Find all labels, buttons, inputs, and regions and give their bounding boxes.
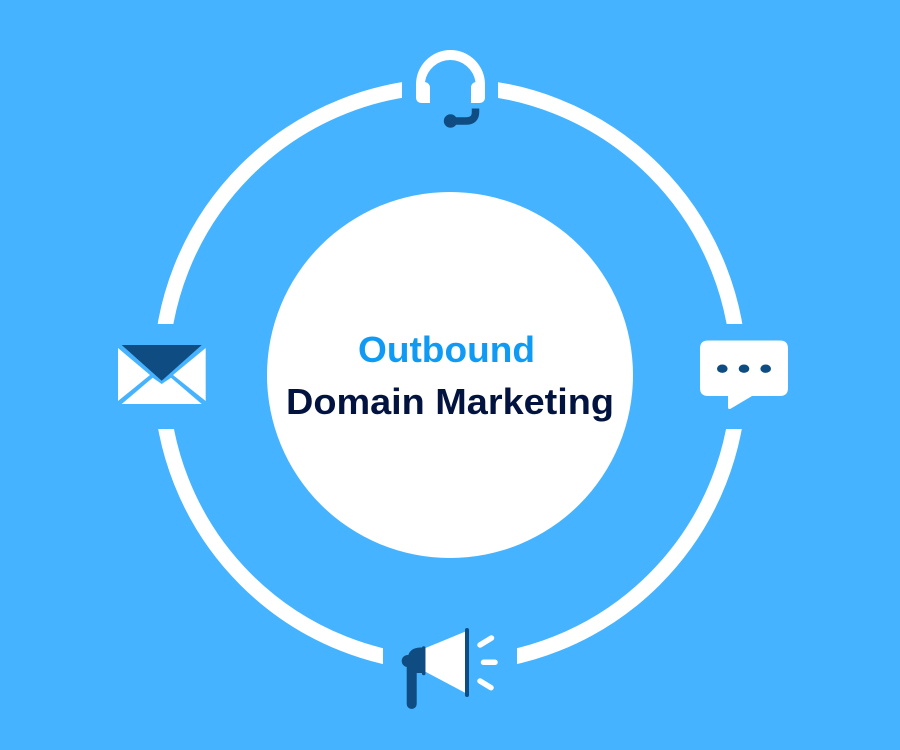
icon: chat bubble bbox=[700, 340, 788, 409]
title line: Domain Marketing: Domain Marketing bbox=[286, 381, 614, 422]
icon: envelope bbox=[118, 345, 206, 404]
icon: headset bbox=[416, 50, 485, 128]
center circle bbox=[267, 192, 633, 558]
icon: megaphone bbox=[402, 630, 495, 709]
title bbox=[286, 329, 614, 422]
outer ring bbox=[140, 70, 760, 680]
title line: Outbound: Outbound bbox=[358, 329, 535, 370]
